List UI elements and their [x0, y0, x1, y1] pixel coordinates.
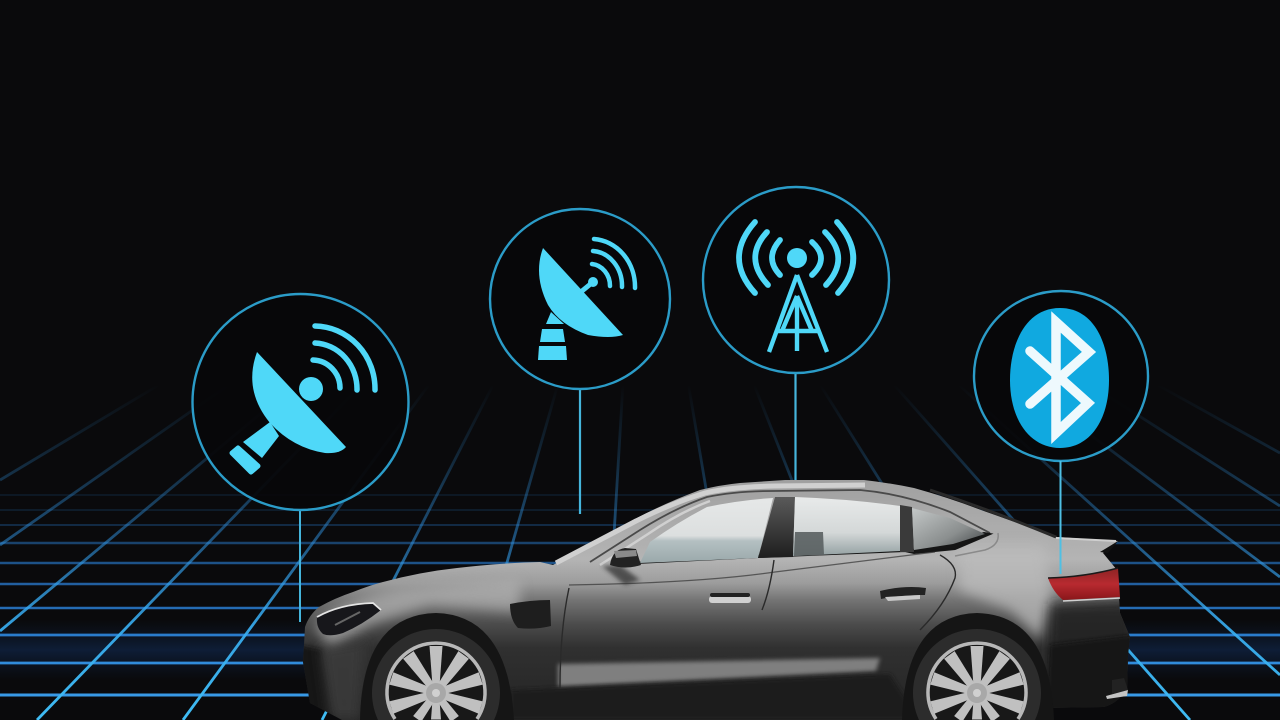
rear wheel	[913, 629, 1041, 720]
front window	[640, 498, 773, 563]
exhaust	[1106, 678, 1128, 699]
scene: connected car infographic	[0, 186, 1280, 720]
icon circle: large satellite dish	[192, 294, 408, 510]
wing mirror	[602, 548, 641, 585]
headlight	[317, 603, 381, 635]
stem: satellite dish 1	[299, 510, 301, 622]
B pillar	[758, 497, 795, 558]
stem: bluetooth	[1060, 461, 1062, 574]
rear window	[912, 508, 985, 550]
wheel arches	[360, 613, 1054, 720]
spoiler	[1100, 541, 1118, 553]
car	[298, 480, 1135, 720]
icon circle: cell tower	[703, 187, 889, 373]
icon circle: small satellite dish	[490, 209, 670, 389]
icon circle: bluetooth	[974, 291, 1148, 461]
roof and pillar trim	[556, 485, 1116, 565]
charge flap	[510, 600, 551, 629]
tail light	[1048, 568, 1120, 601]
middle window	[793, 497, 900, 556]
body shading	[298, 545, 1135, 720]
door lines	[560, 555, 955, 688]
car body	[303, 480, 1130, 720]
front door handle	[709, 593, 751, 603]
rear door handle	[880, 587, 926, 601]
window lower frame	[636, 533, 990, 563]
front wheel	[372, 629, 500, 720]
stem: cell tower	[794, 373, 797, 482]
stem: satellite dish 2	[579, 389, 581, 514]
C pillar	[900, 505, 914, 552]
shoulder crease	[569, 552, 935, 585]
